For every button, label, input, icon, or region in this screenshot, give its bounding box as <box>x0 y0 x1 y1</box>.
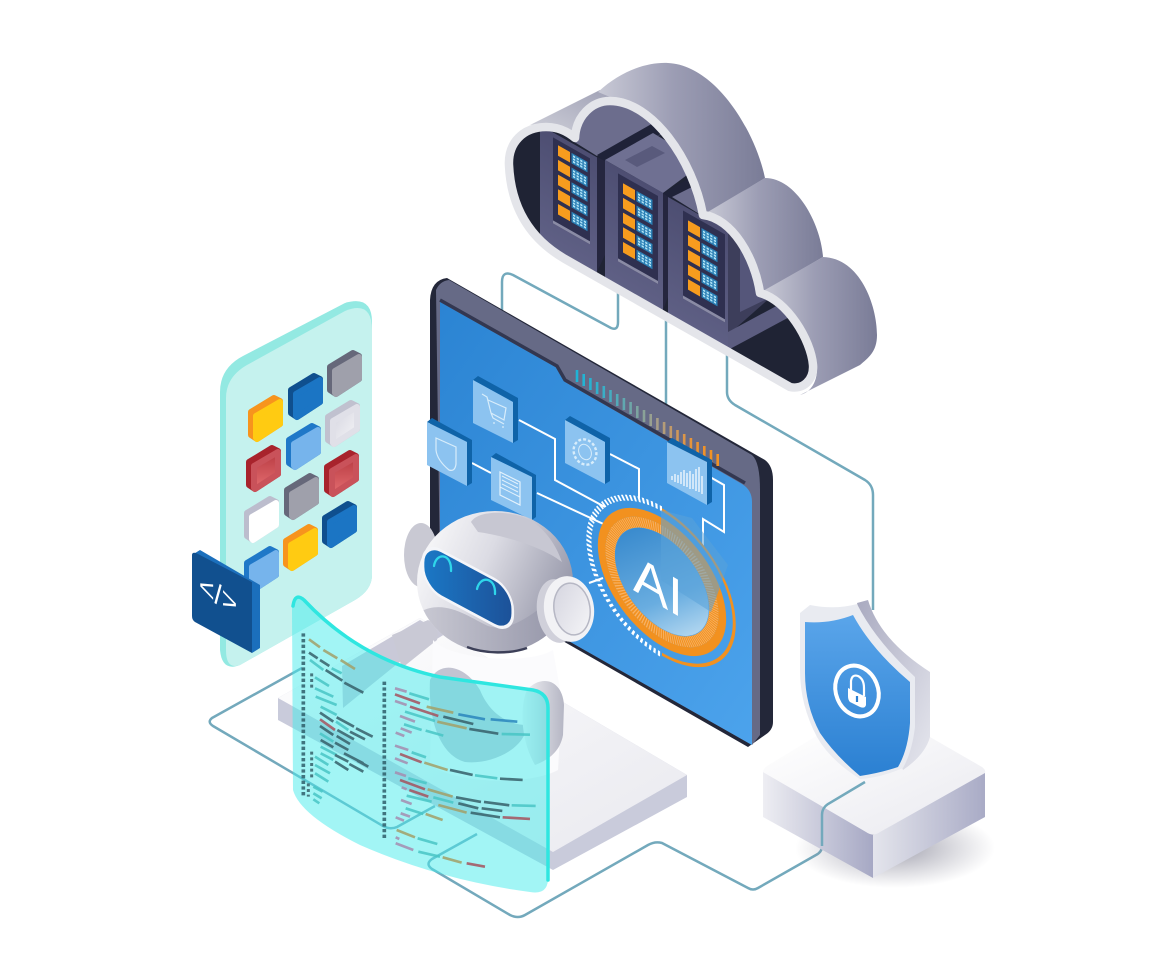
connection wires lower <box>210 668 865 917</box>
monitor screen <box>440 302 752 745</box>
lock icon <box>828 659 886 723</box>
eyes <box>434 556 495 594</box>
cloud extrusion lobes <box>530 63 877 395</box>
robot inner arm <box>430 668 527 762</box>
shield front rim <box>800 604 915 779</box>
code icon tile <box>192 550 260 653</box>
ear link line <box>589 578 603 583</box>
isometric AI cloud illustration <box>192 62 986 918</box>
robot body <box>430 640 562 781</box>
glass code panel <box>292 597 548 892</box>
platform block <box>763 735 985 878</box>
visor <box>423 541 513 635</box>
shield side <box>857 600 930 770</box>
shield blue face <box>805 615 910 776</box>
code lines <box>303 633 536 867</box>
cloud white rim <box>509 101 813 388</box>
app tiles <box>247 353 359 590</box>
shield security platform <box>763 600 995 888</box>
icon: shield tile <box>427 418 472 486</box>
robot right ear <box>533 573 598 645</box>
robot left ear <box>404 523 438 587</box>
AI label: AI <box>633 543 683 631</box>
icon: bar chart tile <box>667 438 712 505</box>
robot right arm <box>522 681 564 765</box>
status tick bar <box>577 370 718 466</box>
shield wire on platform <box>822 782 865 846</box>
icon: gear tile <box>565 416 610 484</box>
neck shadow <box>467 647 527 652</box>
code icon tile: </> <box>199 568 237 623</box>
AI emblem <box>589 467 734 697</box>
connection wires upper <box>502 274 873 610</box>
robot head <box>417 511 573 654</box>
robot <box>392 511 603 781</box>
monitor <box>427 278 773 747</box>
robot left arm <box>392 620 438 668</box>
platform shadow <box>795 808 995 888</box>
robot platform <box>278 618 687 870</box>
cloud with servers <box>500 63 877 400</box>
circuit lines <box>472 420 724 547</box>
app panel <box>220 301 372 667</box>
glass reflection <box>661 510 728 612</box>
cloud interior server racks <box>513 105 809 384</box>
icon: file tile <box>491 453 536 520</box>
icon: shopping cart tile <box>473 376 518 443</box>
